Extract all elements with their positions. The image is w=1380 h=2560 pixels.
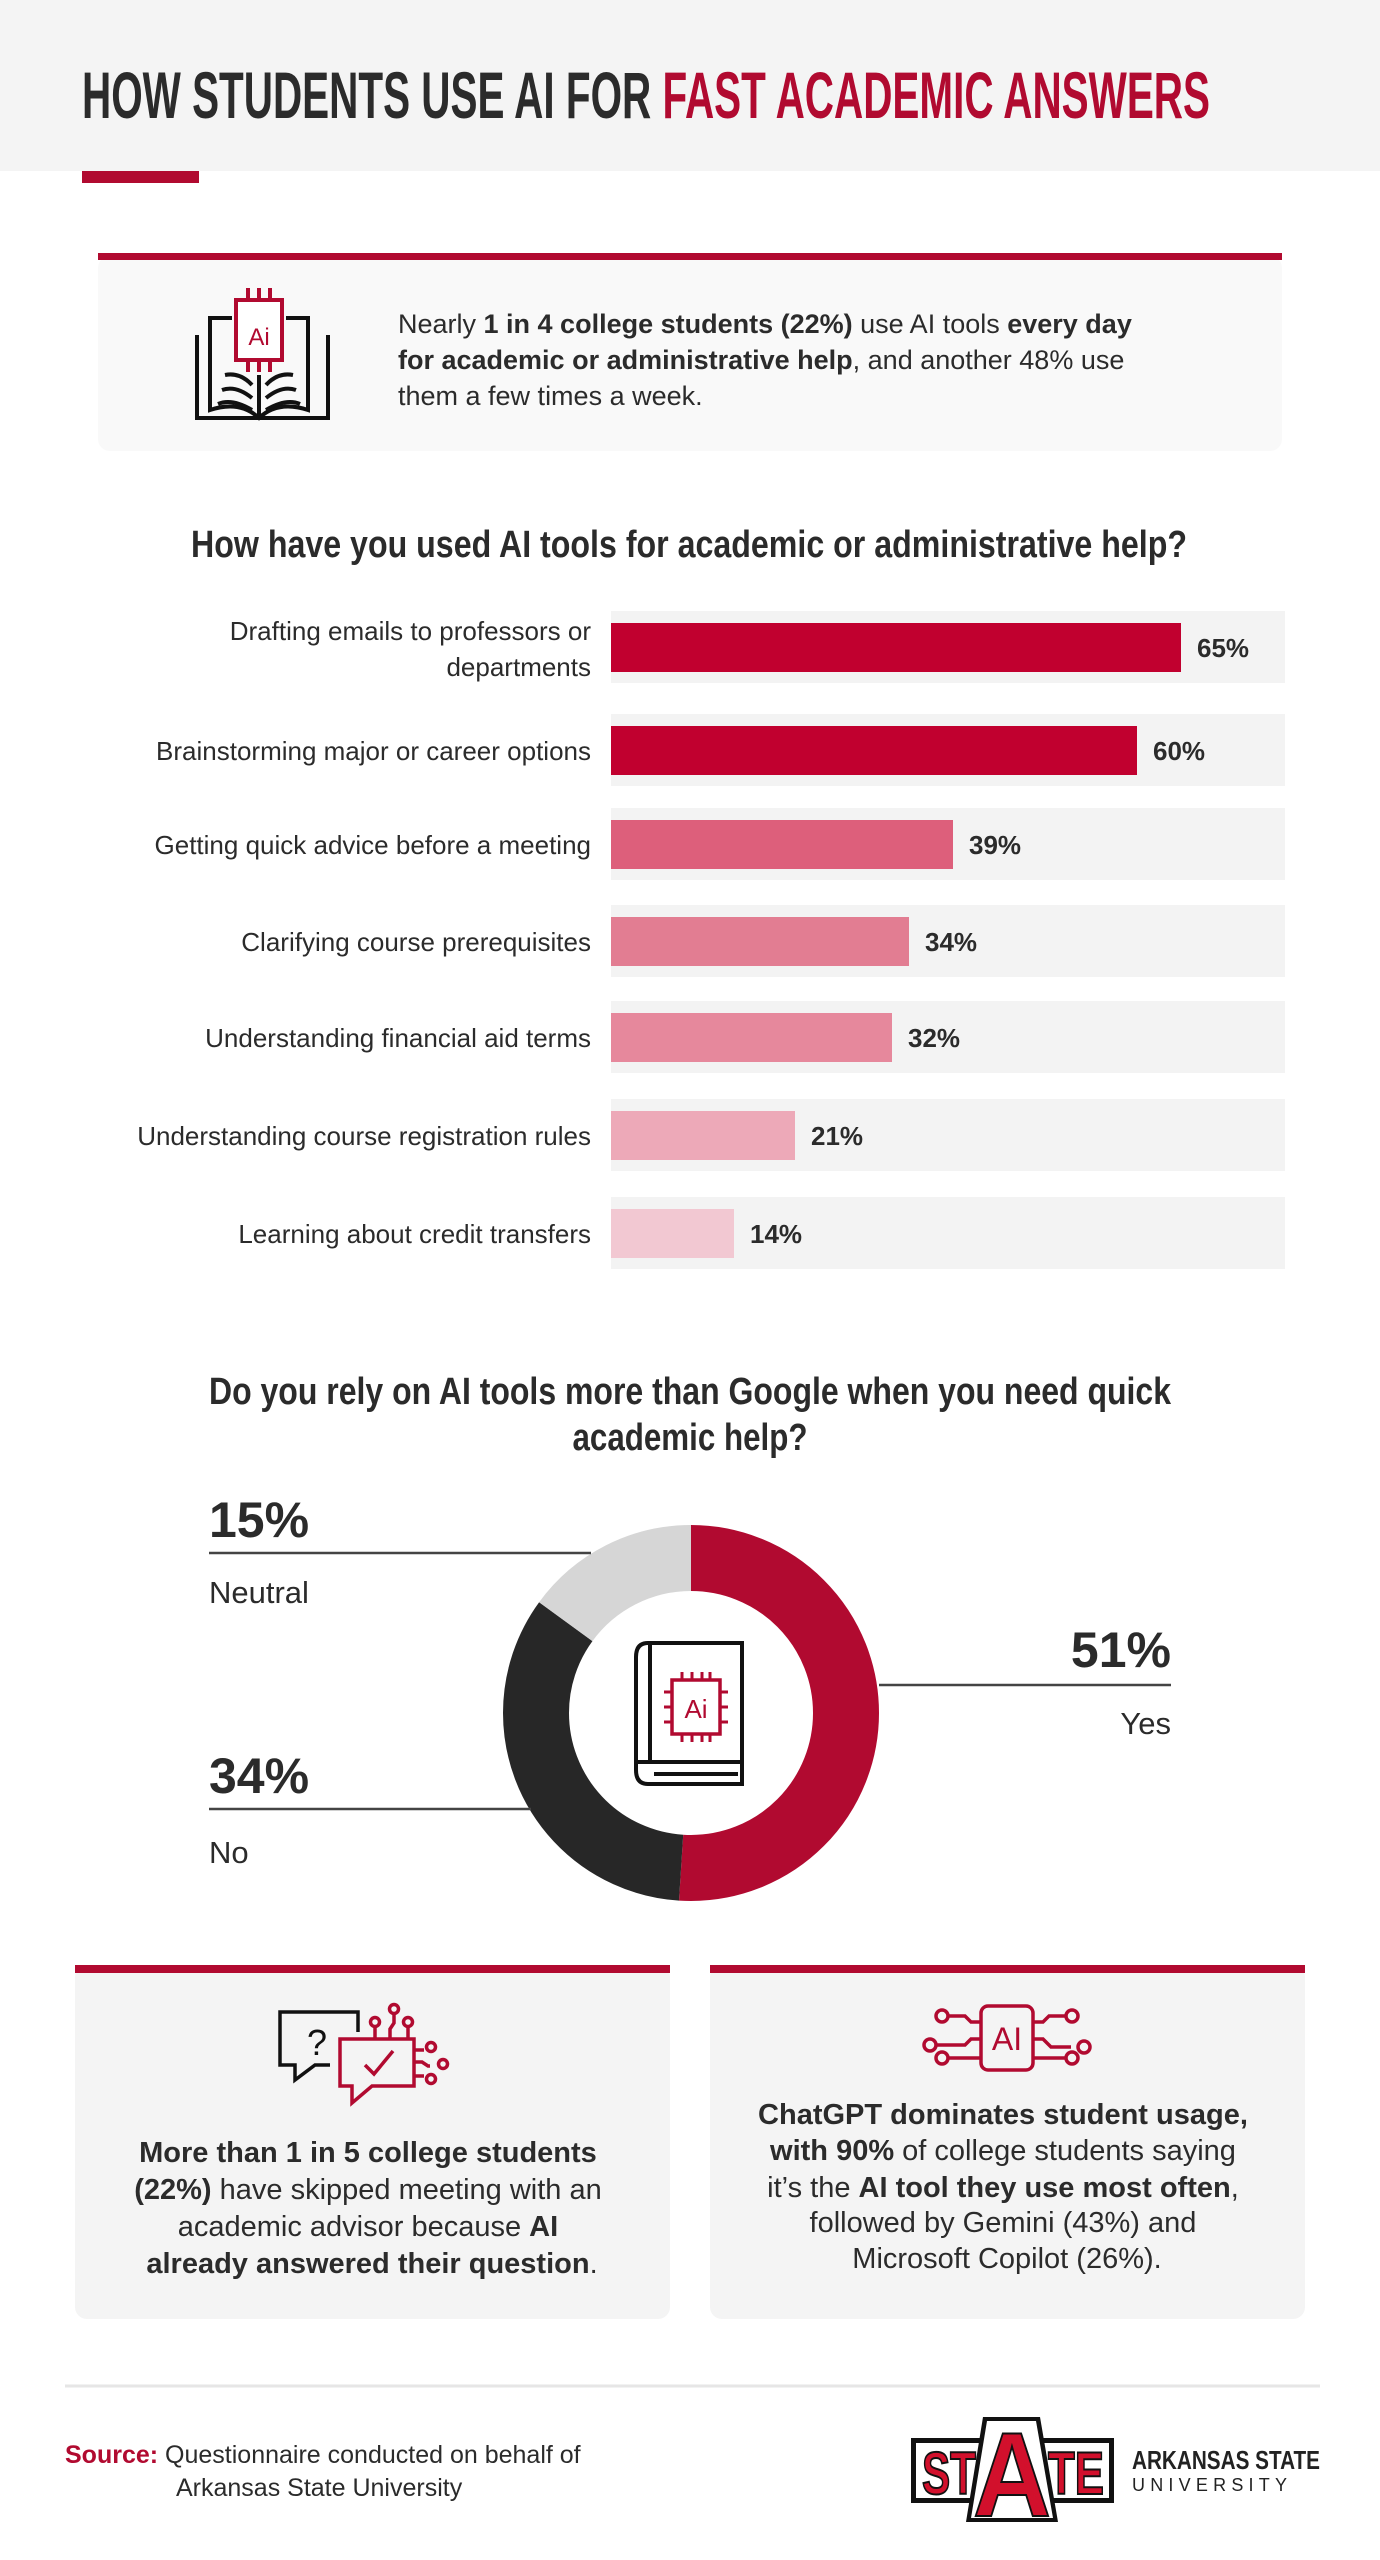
bar: brainstorming: 60%	[1153, 736, 1205, 766]
bar: financial aid: 32%	[908, 1023, 960, 1053]
card text: academic advisor because AI	[178, 2211, 558, 2243]
card: ChatGPT	[710, 1965, 1305, 2319]
bar: prerequisites: Clarifying course prerequisites	[241, 927, 591, 957]
source note	[65, 2441, 581, 2502]
callout text: them a few times a week.	[398, 381, 703, 411]
label: yes: 51%	[1071, 1622, 1171, 1678]
source note: Source: Questionnaire conducted on behalf of	[65, 2441, 581, 2469]
bar: prerequisites: 34%	[925, 927, 977, 957]
logo: Arkansas State: A	[973, 2408, 1051, 2542]
bar: credit transfers: 14%	[750, 1219, 802, 1249]
donut chart: Ai	[684, 1694, 708, 1724]
bar: quick advice: 39%	[969, 830, 1021, 860]
bar: brainstorming	[156, 714, 1285, 786]
bar: registration rules: Understanding course registration rules	[137, 1121, 591, 1151]
label: no: No	[209, 1835, 249, 1870]
header band	[0, 0, 1380, 183]
logo: Arkansas State	[911, 2408, 1320, 2542]
donut question title: Do you rely on AI tools more than Google when you need quick	[209, 1371, 1172, 1413]
label: neutral: 15%	[209, 1492, 309, 1548]
bar: drafting emails: Drafting emails to professors or	[230, 616, 591, 646]
icon: chat question and AI chat	[280, 2004, 448, 2103]
bar: brainstorming: Brainstorming major or career options	[156, 736, 591, 766]
bar: drafting emails: 65%	[1197, 633, 1249, 663]
logo: Arkansas State: ARKANSAS STATE	[1132, 2445, 1320, 2475]
bar: credit transfers: Learning about credit transfers	[238, 1219, 591, 1249]
card text: with 90% of college students saying	[770, 2135, 1236, 2167]
label: no: 34%	[209, 1748, 309, 1804]
icon: AI book	[636, 1643, 742, 1784]
bar: credit transfers	[238, 1197, 1285, 1269]
label: yes: Yes	[1120, 1706, 1171, 1741]
icon: chat question and AI chat: ?	[307, 2022, 327, 2063]
card: ChatGPT: AI	[992, 2021, 1022, 2057]
bar: prerequisites	[241, 905, 1285, 977]
bar: quick advice	[155, 808, 1285, 880]
bar: drafting emails: departments	[446, 652, 591, 682]
icon: AI circuit chip	[924, 2006, 1090, 2070]
callout: daily usage: Ai	[248, 324, 270, 351]
bar chart	[137, 611, 1285, 1269]
card text: it’s the AI tool they use most often,	[767, 2172, 1239, 2204]
donut chart	[536, 1558, 846, 1868]
bar: quick advice: Getting quick advice before a meeting	[155, 830, 591, 860]
donut question title: academic help?	[572, 1417, 808, 1459]
callout text: Nearly 1 in 4 college students (22%) use AI tools every day	[398, 309, 1132, 339]
card text: (22%) have skipped meeting with an	[134, 2174, 602, 2206]
card: skipped advisor	[75, 1965, 670, 2319]
bar chart title: How have you used AI tools for academic or administrative help?	[191, 524, 1187, 566]
bar: financial aid: Understanding financial aid terms	[205, 1023, 591, 1053]
icon: AI book	[197, 288, 328, 418]
callout: daily usage	[98, 253, 1282, 451]
bar: registration rules: 21%	[811, 1121, 863, 1151]
bar: registration rules	[137, 1099, 1285, 1171]
card text: ChatGPT dominates student usage,	[758, 2099, 1248, 2131]
card text: Microsoft Copilot (26%).	[852, 2243, 1162, 2275]
bar: drafting emails	[230, 611, 1285, 683]
card text: already answered their question.	[146, 2248, 598, 2280]
source note: Arkansas State University	[176, 2474, 463, 2502]
label: neutral: Neutral	[209, 1575, 309, 1610]
card text: More than 1 in 5 college students	[139, 2137, 597, 2169]
logo: Arkansas State: TE	[1048, 2440, 1104, 2507]
callout text: for academic or administrative help, and another 48% use	[398, 345, 1124, 375]
card text: followed by Gemini (43%) and	[810, 2207, 1196, 2239]
donut question title	[209, 1371, 1172, 1459]
label: no	[209, 1748, 531, 1870]
bar: financial aid	[205, 1001, 1285, 1073]
label: yes	[879, 1622, 1171, 1741]
logo: Arkansas State: ST	[922, 2440, 976, 2507]
label: neutral	[209, 1492, 591, 1610]
logo: Arkansas State: UNIVERSITY	[1132, 2475, 1287, 2495]
